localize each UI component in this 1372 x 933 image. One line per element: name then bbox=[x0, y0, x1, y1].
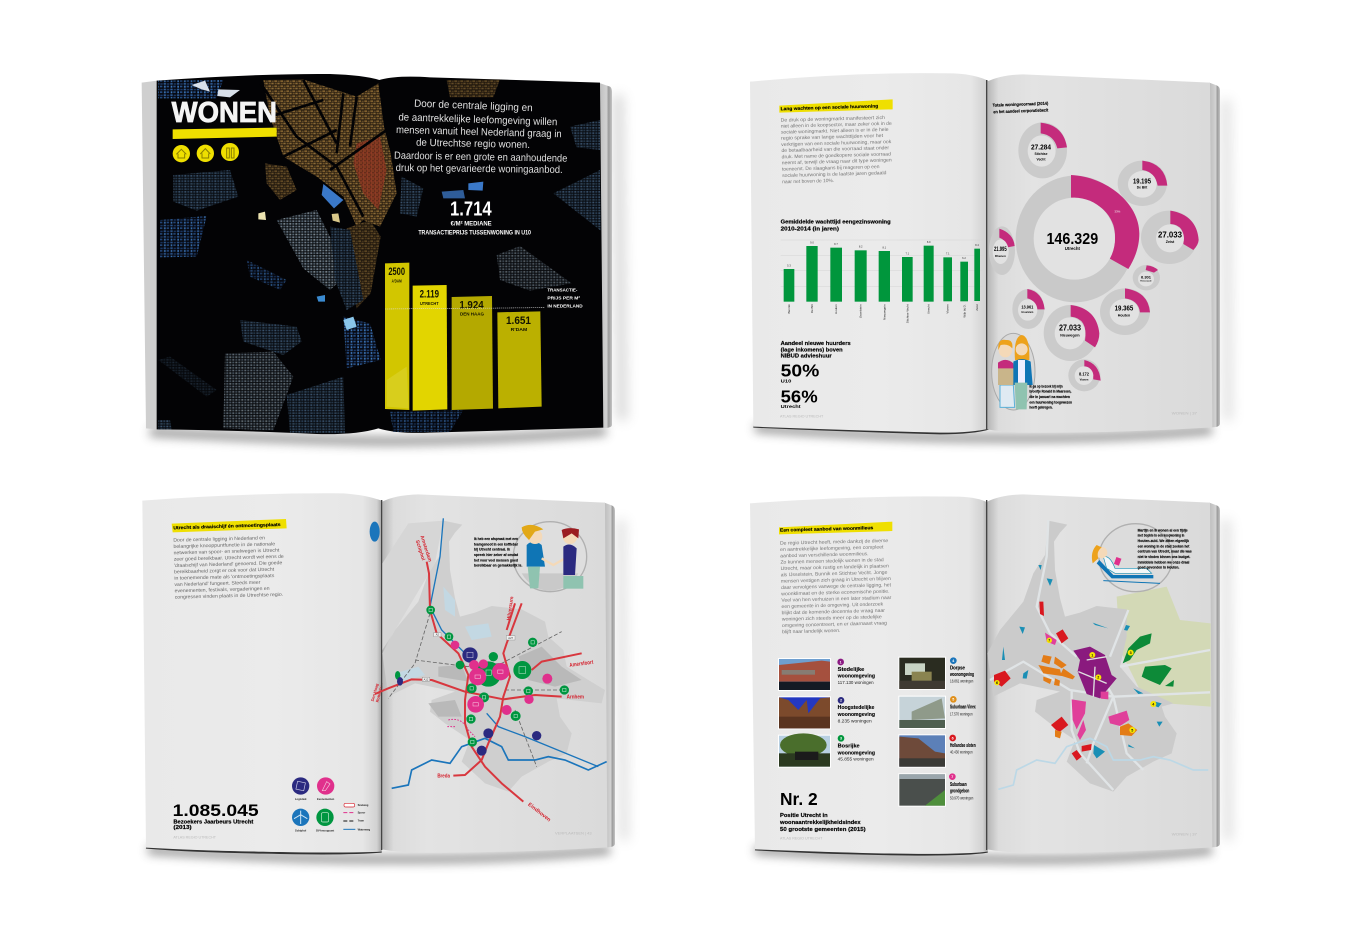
legend: woonmilieu 4: woonomgeving bbox=[949, 672, 974, 678]
chart title: Gemiddelde wachttijd eengezinswoning bbox=[781, 219, 891, 225]
bar chart: price per m2: DEN HAAG bbox=[460, 312, 485, 317]
body text: de betaalbaarheid van die voorraad staat onder bbox=[781, 145, 890, 154]
donut: De Bilt bbox=[1118, 161, 1167, 206]
legend: woonmilieu 2: Hoogstedelijke bbox=[838, 705, 874, 711]
legend: woonmilieu 1: 1 bbox=[840, 660, 842, 664]
body text: als IJsselstein, Bunnik en Stichtse Vecht. Jonge bbox=[781, 570, 888, 578]
donut: IJsselstein bbox=[1012, 289, 1045, 329]
bar chart: price per m2: 2500 bbox=[388, 266, 405, 278]
body text: 'draaischijf van Nederland' genoemd. Die goede bbox=[174, 560, 283, 569]
quote: broertje Ronald in Maarssen, bbox=[1029, 390, 1071, 394]
legend: lines: Snelweg bbox=[358, 803, 369, 807]
city labels: Schiphol bbox=[414, 539, 426, 562]
yellow title bar bbox=[173, 128, 277, 139]
statistic: bezoekers: 1.085.045 bbox=[173, 801, 259, 820]
bar chart: wachttijd: 9.0 bbox=[810, 240, 814, 244]
legend: woonmilieu 7: 50.970 woningen bbox=[950, 795, 973, 801]
statistic: Nr. 2: Nr. 2 bbox=[780, 789, 818, 809]
intro text: de Utrechtse regio wonen. bbox=[416, 138, 530, 151]
legend: woonmilieu 5 bbox=[950, 696, 976, 717]
heading highlight bbox=[779, 99, 893, 113]
district numbers bbox=[994, 638, 1156, 733]
body text: Zo kunnen mensen stedelijk wonen in de stad bbox=[780, 557, 884, 566]
city labels: Eindhoven bbox=[526, 802, 552, 823]
district numbers: 6 bbox=[996, 681, 998, 685]
title: WONEN: WONEN bbox=[172, 97, 277, 129]
body text: evenementen, festivals, vergaderingen en bbox=[175, 586, 270, 594]
heading highlight: Lang wachten op een sociale huurwoning bbox=[781, 103, 878, 111]
donut: Renswoude: Renswoude bbox=[1140, 281, 1152, 283]
body text: belangrijke knooppuntfunctie in de nationale bbox=[173, 541, 276, 550]
body text: naar net boven de 10%. bbox=[782, 178, 834, 185]
photo 4 bbox=[898, 657, 946, 690]
quote: met Sophie in een koopwoning in bbox=[1138, 534, 1184, 538]
donut: Vianen: 8.172 bbox=[1079, 372, 1089, 377]
quote: Houten-zuid. We zitten eigenlijk bbox=[1138, 539, 1189, 543]
photo 1 bbox=[778, 658, 831, 691]
statistic: Nr. 2: 50 grootste gemeenten (2015) bbox=[780, 827, 866, 833]
quote: het voor veel mensen goed bbox=[474, 558, 518, 562]
photo 5 bbox=[898, 696, 946, 729]
statistic: bezoekers bbox=[173, 801, 259, 831]
chart title: 2010-2014 (in jaren) bbox=[781, 226, 839, 232]
quote bbox=[1029, 384, 1072, 410]
heading highlight: Een compleet aanbod van woonmilieus bbox=[780, 525, 874, 533]
districts bbox=[994, 565, 1174, 761]
body text: De druk op de woningmarkt manifesteert zich bbox=[781, 115, 885, 124]
chart title bbox=[993, 101, 1049, 114]
statistic: bezoekers: (2013) bbox=[173, 825, 192, 831]
illustration: handshake meeting bbox=[513, 522, 587, 592]
quote bbox=[474, 537, 522, 568]
body text: woningen zich steeds meer op de stedelijke bbox=[782, 614, 882, 623]
city labels: Hilversum bbox=[506, 596, 515, 621]
donut: Zeist: Zeist bbox=[1166, 240, 1175, 244]
district numbers: 5 bbox=[1131, 728, 1133, 732]
donut: Vianen bbox=[1068, 359, 1101, 391]
quote: teamgenoot in een koffiebar bbox=[474, 542, 519, 546]
label: Den Haag Rotterdam: Rotterdam bbox=[374, 682, 385, 703]
legend: lines: Spoor bbox=[358, 810, 365, 814]
body text bbox=[781, 115, 894, 185]
donut: Utrecht: 33% bbox=[1114, 210, 1121, 214]
key figure: 1.714: 1.714 bbox=[450, 197, 492, 220]
quote: een woning in de stad zoeken het bbox=[1138, 544, 1190, 548]
bar chart: wachttijd: 8.4 bbox=[975, 243, 979, 247]
legend: woonmilieu 7: Suburbaan bbox=[950, 782, 967, 788]
body text: niet alleen in de koopsector, maar zeker ook in de bbox=[781, 121, 892, 130]
spread: Utrecht als draaischijf bbox=[142, 493, 624, 859]
legend: location icons: Schiphol bbox=[295, 828, 307, 832]
donut: Bunnik: Rhenen bbox=[995, 254, 1006, 258]
bar chart: wachttijd: 7.1 bbox=[946, 252, 950, 256]
bar chart: price per m2 bbox=[385, 263, 545, 411]
donut: Bunnik: 21.995 bbox=[994, 246, 1007, 253]
statistic: nieuwe huurders: U10 bbox=[781, 378, 792, 384]
legend: woonmilieu 5: 5 bbox=[952, 698, 954, 702]
bar chart: wachttijd: 8.7 bbox=[834, 242, 838, 246]
black map pages bbox=[157, 74, 603, 434]
body text: regio sprake van lange wachttijden voor het bbox=[781, 133, 884, 142]
statistic: nieuwe huurders: 56% bbox=[781, 386, 818, 406]
donut: Utrecht: 146.329 bbox=[1046, 231, 1098, 248]
legend: woonmilieu 2 bbox=[837, 697, 875, 724]
donut: Houten: 19.365 bbox=[1115, 304, 1133, 313]
legend: location icons: OV-knooppunt bbox=[316, 828, 334, 832]
donut: Stichtse Vecht: Stichtse bbox=[1035, 152, 1048, 156]
body text: netwerken van spoor- en snelwegen is Utrecht bbox=[174, 548, 280, 556]
legend: woonmilieu 3: woonomgeving bbox=[837, 750, 875, 756]
bar chart: price per m2: 2.119 bbox=[420, 289, 439, 301]
key figure: 1.714: €/M² MEDIANE bbox=[451, 220, 492, 227]
chart annotation: PRIJS PER M² bbox=[547, 296, 580, 302]
bar chart: price per m2: 1.651 bbox=[506, 315, 531, 327]
body text: Veel van hen verhuizen in een later stadium naar bbox=[781, 595, 892, 604]
key figure: 1.714 bbox=[418, 197, 532, 237]
legend: woonmilieu 1: 117.130 woningen bbox=[838, 680, 874, 686]
city labels: Amsterdam bbox=[418, 535, 433, 563]
donut: Stichtse Vecht: 27.284 bbox=[1031, 142, 1052, 151]
body text: aanbod van verschillende woonmilieus. bbox=[780, 551, 869, 559]
legend: lines bbox=[343, 803, 370, 831]
heading highlight: Utrecht als draaischijf én ontmoetingsplaats bbox=[173, 522, 281, 530]
legend: woonmilieu 2: woonomgeving bbox=[837, 712, 875, 718]
legend: woonmilieu 3: Bosrijke bbox=[838, 743, 860, 749]
statistic: nieuwe huurders: Utrecht bbox=[781, 404, 801, 410]
quote: centrum van Utrecht, maar die was bbox=[1138, 550, 1192, 554]
donut: De Bilt: De Bilt bbox=[1137, 186, 1148, 190]
body text: sociale huurwoning is de laatste jaren gedaald bbox=[782, 170, 887, 179]
bar chart: wachttijd: Nieuwegein bbox=[882, 304, 886, 320]
district numbers: 1 bbox=[1091, 653, 1093, 657]
statistic: nieuwe huurders: Aandeel nieuwe huurders bbox=[781, 341, 851, 347]
bar chart: wachttijd: Wijk bij D. bbox=[962, 304, 966, 318]
legend: woonmilieu 6: 40.430 woningen bbox=[950, 750, 973, 756]
district numbers: 3 bbox=[1130, 651, 1132, 655]
key figure: 1.714: TRANSACTIEPRIJS TUSSENWONING IN U10 bbox=[418, 231, 532, 237]
chart title bbox=[781, 219, 891, 232]
statistic: nieuwe huurders: NIBUD advieshuur bbox=[781, 353, 832, 359]
right page: regional map bbox=[375, 494, 615, 853]
icons: housing types bbox=[173, 143, 239, 162]
legend: woonmilieu 4: 18.861 woningen bbox=[950, 679, 973, 685]
quote: goed gevonden in Houten. bbox=[1138, 566, 1179, 570]
bar chart: price per m2: 1.924 bbox=[459, 300, 484, 312]
legend: location icons: Evenementen bbox=[317, 797, 335, 801]
legend: woonmilieu 4 bbox=[949, 657, 974, 685]
body text: Utrecht, maar ook rustig en landelijk in plaatsen bbox=[781, 563, 889, 572]
intro text: mensen vanuit heel Nederland graag in bbox=[396, 125, 562, 140]
legend: woonmilieu 5: 17.570 woningen bbox=[950, 711, 973, 717]
footer: ATLAS REGIO UTRECHT bbox=[780, 415, 824, 419]
photo 6 bbox=[898, 734, 946, 768]
statistic: nieuwe huurders: 50% bbox=[781, 361, 819, 381]
right page: living environments map bbox=[987, 494, 1220, 853]
left page bbox=[142, 493, 385, 853]
statistic: nieuwe huurders: (lage inkomens) boven bbox=[781, 347, 843, 353]
donut: Bunnik bbox=[989, 226, 1015, 275]
quote: bereikbaar en gemakkelijk is. bbox=[474, 564, 522, 568]
body text: blijft naar landelijk wonen. bbox=[782, 628, 841, 635]
bar chart: wachttijd: Zeist bbox=[975, 304, 979, 311]
body text: omgeving concentreert, en er daarnaast vraag bbox=[782, 620, 887, 629]
bar chart: wachttijd bbox=[781, 240, 983, 323]
body text: daar vervolgens vanwege de centrale ligging, het bbox=[781, 582, 892, 591]
body text: blijkt dat de komende decennia de vraag naar bbox=[782, 608, 885, 616]
illustration: young couple bbox=[992, 333, 1035, 410]
quote: een huurwoning toegewezen bbox=[1029, 400, 1072, 404]
bar chart: wachttijd: Bunnik bbox=[787, 304, 791, 313]
label: Den Haag Rotterdam bbox=[370, 682, 385, 703]
road shields: A2 bbox=[436, 633, 439, 637]
legend: woonmilieu 2: 2 bbox=[840, 699, 842, 703]
map base bbox=[987, 520, 1211, 792]
donut: Vianen: Vianen bbox=[1080, 377, 1089, 381]
legend: woonmilieu 1 bbox=[837, 659, 875, 686]
legend: woonmilieu 1: woonomgeving bbox=[837, 674, 875, 680]
body text: neemt af, terwijl de vraag naar dit type woningen bbox=[782, 157, 892, 166]
spread: woonmilieus bbox=[750, 494, 1228, 860]
bar chart: wachttijd: 8.2 bbox=[859, 245, 863, 249]
bar chart: wachttijd: 8.1 bbox=[882, 245, 887, 249]
body text: congressen vinden plaats in de Utrechtse regio. bbox=[175, 592, 283, 601]
quote bbox=[1138, 528, 1192, 570]
body text bbox=[173, 535, 285, 601]
spread: Wonen cover with night map bbox=[142, 74, 622, 441]
chart annotation bbox=[547, 288, 583, 309]
left page bbox=[750, 73, 990, 433]
city labels: Arnhem bbox=[567, 694, 584, 700]
body text: toeneemt. De slaagkans bij reageren op een bbox=[782, 164, 880, 173]
highways and rivers bbox=[375, 518, 607, 802]
legend: woonmilieu 1: Stedelijke bbox=[838, 667, 864, 673]
legend: woonmilieu 5: Suburbaan Vinex bbox=[950, 705, 976, 711]
heading highlight bbox=[172, 519, 287, 532]
road shields: A27 bbox=[508, 636, 514, 640]
left page bbox=[750, 496, 988, 855]
bar chart: wachttijd: 8.9 bbox=[927, 240, 931, 244]
donut: Zeist: 27.033 bbox=[1158, 230, 1183, 239]
chart annotation: TRANSACTIE- bbox=[547, 288, 578, 294]
body text: in toenemende mate als 'ontmoetingsplaats bbox=[174, 573, 275, 582]
donut: Renswoude: 6.301 bbox=[1141, 274, 1152, 279]
right page bbox=[987, 74, 1220, 433]
intro text: druk op het gevarieerde woningaanbod. bbox=[396, 163, 563, 176]
body text bbox=[780, 538, 893, 635]
page number: WONEN | 37 bbox=[1172, 833, 1197, 837]
donut: Nieuwegein bbox=[1044, 305, 1099, 361]
legend: location icons: Logistiek bbox=[295, 797, 307, 801]
legend: woonmilieu 7: grondgebon bbox=[950, 789, 970, 795]
page number: WONEN | 37 bbox=[1172, 412, 1197, 416]
legend: woonmilieu 6 bbox=[949, 735, 976, 756]
legend: location icons bbox=[292, 777, 335, 832]
donut: Utrecht bbox=[1016, 175, 1139, 302]
bar chart: wachttijd: 6.2 bbox=[962, 256, 966, 260]
page number: VERPLAATSEN | 43 bbox=[555, 832, 592, 836]
quote: die in januari na wachten bbox=[1029, 395, 1070, 399]
statistic: Nr. 2: Positie Utrecht in bbox=[780, 813, 828, 819]
donut: Houten: Houten bbox=[1118, 314, 1130, 318]
road shields bbox=[422, 633, 515, 681]
body text: sociale woningmarkt. Niet alleen is er in de hele bbox=[781, 127, 889, 136]
district numbers: 4 bbox=[1152, 702, 1155, 706]
quote: Inmiddels hebben we onze draai bbox=[1138, 560, 1189, 564]
heading highlight bbox=[779, 522, 892, 534]
bar chart: wachttijd: 5.3 bbox=[787, 263, 791, 267]
donut: Utrecht: Utrecht bbox=[1065, 246, 1080, 251]
quote: niet te vinden binnen ons budget. bbox=[1138, 555, 1190, 559]
donut: Stichtse Vecht bbox=[1018, 122, 1067, 178]
bar chart: wachttijd: Utrecht bbox=[927, 304, 931, 314]
body text: woonklimaat en de sterke economische positie. bbox=[781, 589, 890, 597]
body text: Door de centrale ligging in Nederland en bbox=[173, 535, 265, 544]
label: Den Haag Rotterdam: Den Haag bbox=[370, 682, 380, 702]
statistic: nieuwe huurders bbox=[781, 341, 851, 410]
bar chart: price per m2: UTRECHT bbox=[420, 301, 439, 306]
donut: Nieuwegein: 27.033 bbox=[1059, 323, 1082, 332]
quote: bij Utrecht centraal. Ik bbox=[474, 548, 511, 552]
quote: heeft gekregen. bbox=[1029, 406, 1053, 410]
bar chart: wachttijd: Houten bbox=[834, 304, 838, 314]
body text: druk. Met name de goedkopere sociale voorraad bbox=[782, 151, 891, 160]
spread: sociale huurwoning bbox=[750, 73, 1228, 438]
icon: blue drop on page edge bbox=[370, 522, 380, 542]
legend: woonmilieu 4: Dorpse bbox=[950, 665, 965, 671]
bar chart: wachttijd: De Bilt bbox=[810, 304, 814, 313]
donut: IJsselstein: 13.961 bbox=[1021, 305, 1034, 310]
donut: Houten bbox=[1100, 288, 1150, 335]
intro text bbox=[394, 99, 568, 176]
chart annotation: IN NEDERLAND bbox=[547, 303, 583, 309]
statistic: Nr. 2 bbox=[779, 789, 866, 833]
donut: IJsselstein: IJsselstein bbox=[1021, 311, 1034, 314]
map base bbox=[382, 521, 605, 792]
donut: De Bilt: 19.195 bbox=[1133, 176, 1151, 185]
donut: Stichtse Vecht: Vecht bbox=[1037, 158, 1046, 162]
bar chart: wachttijd: Stichtse Vecht bbox=[905, 304, 909, 323]
legend: lines: Tram bbox=[358, 818, 365, 822]
quote: spreek hier zeker af omdat bbox=[474, 553, 519, 557]
body text: en aantrekkelijke leefomgeving, een compleet bbox=[780, 544, 884, 553]
body text: een gemeente in de omgeving. Uit onderzoek bbox=[781, 601, 884, 610]
legend: woonmilieu 7 bbox=[949, 773, 973, 801]
donut: Nieuwegein: Nieuwegein bbox=[1060, 334, 1080, 338]
legend: woonmilieu 3: 3 bbox=[840, 737, 842, 741]
donut: Renswoude bbox=[1133, 265, 1160, 290]
photo 2 bbox=[778, 696, 831, 729]
statistic: Nr. 2: woonaantrekkelijkheidsindex bbox=[779, 820, 861, 826]
statistic: bezoekers: Bezoekers Jaarbeurs Utrecht bbox=[173, 820, 254, 826]
body text: van Nederland' fungeert. Steeds meer bbox=[174, 580, 261, 588]
city labels: Amersfoort bbox=[569, 660, 594, 669]
legend: woonmilieu 2: 8.235 woningen bbox=[838, 718, 872, 724]
legend: woonmilieu 7: 7 bbox=[951, 775, 953, 779]
map markers bbox=[395, 606, 569, 756]
footer: ATLAS REGIO UTRECHT bbox=[173, 835, 217, 839]
legend: lines: Waterweg bbox=[358, 827, 370, 831]
quote: Ik ga op bezoek bij mijn bbox=[1029, 384, 1063, 388]
photo 7 bbox=[898, 773, 946, 807]
city labels bbox=[414, 535, 594, 823]
body text: zeer goed bereikbaar. Utrecht wordt wel eens de bbox=[174, 554, 284, 563]
body text: De regio Utrecht heeft, mede dankzij de diverse bbox=[780, 538, 889, 547]
bar chart: wachttijd: Vianen bbox=[946, 304, 950, 314]
district numbers: 2 bbox=[1097, 676, 1099, 680]
footer: ATLAS REGIO UTRECHT bbox=[780, 837, 823, 841]
chart title: en het aandeel corporatiebezit bbox=[993, 107, 1049, 114]
intro text: de aantrekkelijke leefomgeving willen bbox=[398, 112, 558, 128]
body text: bereikbaarheid zorgt er ook voor dat Utrecht bbox=[174, 567, 275, 575]
legend: woonmilieu 6: Hollandse sloten bbox=[950, 743, 976, 749]
bar chart: price per m2: R'DAM bbox=[511, 327, 528, 332]
city labels: Breda bbox=[437, 773, 451, 779]
legend: woonmilieu 3: 45.855 woningen bbox=[838, 757, 874, 763]
body text: verkrijgen van een sociale huurwoning, maar ook bbox=[781, 139, 892, 148]
bar chart: wachttijd: 7.1 bbox=[905, 251, 910, 255]
photo 3 bbox=[778, 733, 831, 768]
night-time building map bbox=[158, 79, 601, 433]
body text: mensen vestigen zich graag in Utrecht en blijven bbox=[781, 576, 891, 585]
illustration: woman reading bbox=[1092, 524, 1172, 592]
intro text: Daardoor is er een grote en aanhoudende bbox=[394, 151, 568, 165]
legend: woonmilieu 3 bbox=[837, 735, 875, 763]
road shields: A12 bbox=[424, 677, 429, 681]
intro text: Door de centrale ligging en bbox=[414, 99, 533, 114]
chart title: Totale woningvoorraad (2014) bbox=[993, 101, 1049, 108]
legend: woonmilieu 6: 6 bbox=[952, 736, 954, 740]
quote: Martijn en ik wonen al een tijdje bbox=[1138, 528, 1188, 532]
donut: Zeist bbox=[1141, 211, 1199, 264]
bar chart: price per m2: A'DAM bbox=[392, 279, 402, 284]
district numbers: 7 bbox=[1048, 639, 1050, 643]
legend: woonmilieu 4: 4 bbox=[952, 659, 955, 663]
quote: Ik heb een afspraak met een bbox=[474, 537, 518, 541]
bar chart: wachttijd: IJsselstein bbox=[859, 304, 863, 318]
